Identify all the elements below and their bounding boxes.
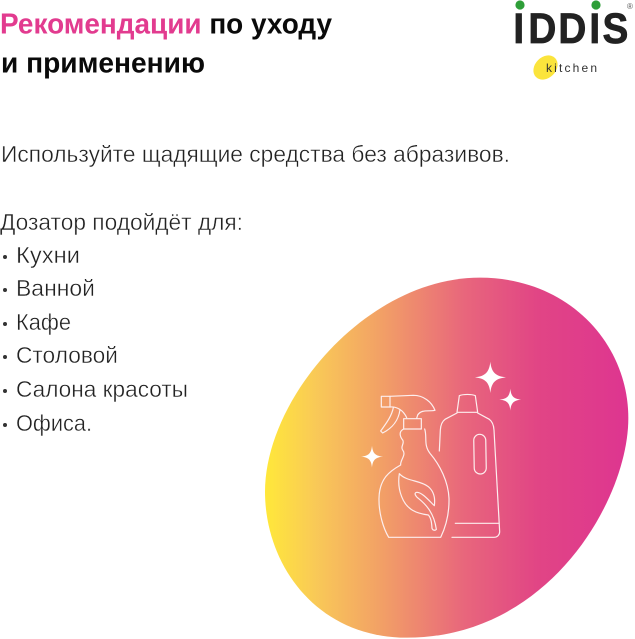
gradient blob bbox=[265, 278, 628, 638]
list heading: Дозатор подойдёт для: bbox=[0, 209, 243, 235]
title bbox=[0, 8, 332, 80]
title: и применению bbox=[1, 48, 205, 80]
list of places: Салона красоты bbox=[16, 376, 188, 402]
logo: IDDIS kitchen bbox=[513, 0, 633, 84]
list of places: Офиса. bbox=[16, 410, 92, 436]
icon: detergent jug bbox=[439, 394, 500, 537]
list of places: Кафе bbox=[16, 309, 71, 335]
list of places: Столовой bbox=[16, 342, 118, 368]
icon: cleaning bottles with sparkles bbox=[361, 362, 521, 537]
icon: spray bottle bbox=[379, 395, 449, 537]
list of places: Ванной bbox=[16, 275, 95, 301]
logo: IDDIS kitchen: kitchen bbox=[546, 61, 597, 75]
list of places bbox=[3, 242, 188, 436]
logo: IDDIS kitchen: ® bbox=[627, 2, 633, 11]
list of places: Кухни bbox=[16, 242, 80, 268]
logo: IDDIS kitchen: IDDIS bbox=[513, 4, 628, 52]
intro text: Используйте щадящие средства без абразивов. bbox=[1, 141, 510, 167]
title: Рекомендации по уходу bbox=[0, 8, 332, 40]
icon: sparkles bbox=[361, 362, 521, 468]
